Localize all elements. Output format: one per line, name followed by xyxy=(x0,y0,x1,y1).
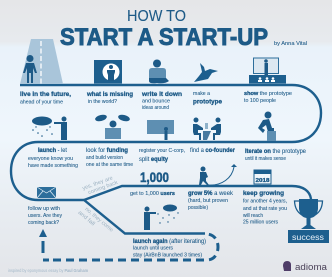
success badge: success xyxy=(292,232,324,242)
text: keep growing: will reach xyxy=(243,213,263,219)
logo: adioma xyxy=(283,261,327,272)
dashed return path xyxy=(43,234,218,260)
text: live in the future xyxy=(20,91,71,106)
fork label: no: and fall xyxy=(77,210,96,227)
text: look for funding: one at the same time xyxy=(86,162,133,168)
icon: presentation screen xyxy=(249,58,286,84)
fork label: no xyxy=(77,205,114,239)
icon: idea cloud xyxy=(32,116,67,140)
text: write it down xyxy=(141,91,182,111)
text: follow up: users. Are they xyxy=(28,213,62,219)
icon: walker with growth arrow xyxy=(199,164,237,185)
text: iterate on: iterate on the prototype xyxy=(245,149,307,155)
icon: person thinking xyxy=(94,114,131,139)
text: live in the future: live in the future, xyxy=(20,91,71,98)
text: grow 5% xyxy=(188,191,234,211)
text: launch: everyone know you xyxy=(28,156,73,162)
text: launch: launch - let xyxy=(38,148,67,154)
text: keep growing: keep growing xyxy=(243,190,284,197)
text: grow 5%: (hard, but proven xyxy=(188,198,228,204)
text: grow 5%: possible) xyxy=(188,205,208,211)
icon: bird xyxy=(194,63,218,82)
fork label: yes xyxy=(82,174,119,198)
text: register C-corp: split equity xyxy=(139,157,169,163)
text: what is missing: in the world? xyxy=(88,99,117,105)
text: keep growing xyxy=(243,190,287,226)
text: make a prototype: prototype xyxy=(193,98,222,106)
text: look for funding: look for funding xyxy=(86,148,128,154)
icon: person with cloud xyxy=(144,204,179,230)
text: launch again: launch until users xyxy=(133,246,173,252)
byline: by Anna Vital xyxy=(274,41,307,47)
title: START A START-UP xyxy=(60,24,268,51)
text: follow up: follow up with xyxy=(28,206,60,212)
icon: two people at table xyxy=(193,118,221,140)
text: write it down: write it down xyxy=(141,91,182,98)
text: write it down: and bounce xyxy=(142,98,170,104)
text: get to 1,000 users: get to 1,000 users xyxy=(130,191,175,197)
text: launch again: stay (AirBnB launched 3 times) xyxy=(133,252,202,258)
credit: inspired by eponymous essay by Paul Graham xyxy=(8,268,88,273)
text: grow 5%: grow 5% a week xyxy=(188,191,234,197)
icon: calendar 2018: 2018 xyxy=(256,178,270,184)
text: make a prototype: make a xyxy=(193,91,210,97)
icon: trophy xyxy=(294,199,322,229)
icon: road xyxy=(20,39,63,84)
text: iterate on xyxy=(245,149,307,162)
icon: calendar 2018 xyxy=(254,170,271,184)
text: look for funding: and build version xyxy=(86,155,123,161)
winding path xyxy=(11,85,321,234)
text: follow up xyxy=(28,206,62,226)
icon: envelope xyxy=(37,187,56,198)
text: launch: have made something xyxy=(28,163,78,169)
logo: adioma: adioma xyxy=(295,262,327,272)
number: 1,000: 1,000 xyxy=(140,169,169,185)
text: launch again: launch again (after iterating) xyxy=(133,239,206,245)
fork label: no: no, they come xyxy=(83,206,114,234)
text: show the prototype: to 100 people xyxy=(244,98,276,104)
fork label: yes: coming back xyxy=(87,180,119,196)
icon: person writing xyxy=(149,60,169,83)
text: follow up: coming back? xyxy=(28,220,59,226)
text: show the prototype xyxy=(244,91,292,104)
text: make a prototype xyxy=(193,91,222,106)
text: what is missing xyxy=(86,91,133,105)
text: iterate on: until it makes sense xyxy=(245,156,286,162)
success badge xyxy=(288,230,329,243)
text: launch again xyxy=(133,239,206,258)
text: show the prototype: show the prototype xyxy=(244,91,292,97)
text: register C-corp xyxy=(139,148,185,163)
text: register C-corp: register your C-corp, xyxy=(139,148,185,154)
text: keep growing: for another 4 years, xyxy=(243,198,287,204)
title: HOW TO xyxy=(127,8,186,25)
text: launch xyxy=(28,148,78,169)
title xyxy=(60,8,268,51)
text: live in the future: ahead of your time xyxy=(20,100,63,106)
text: find a co-founder: find a co-founder xyxy=(190,148,236,154)
arrow up xyxy=(39,229,47,237)
text: what is missing: what is missing xyxy=(86,91,133,98)
icon: missing person frame xyxy=(94,60,122,84)
text: write it down: ideas around xyxy=(142,105,169,111)
text: keep growing: and at that rate you xyxy=(243,206,287,212)
text: keep growing: 25 million users xyxy=(243,220,278,226)
text: look for funding xyxy=(86,148,133,168)
icon: board xyxy=(147,120,174,140)
icon: person at laptop xyxy=(258,112,276,141)
fork label: yes: yes, they are xyxy=(82,175,114,192)
